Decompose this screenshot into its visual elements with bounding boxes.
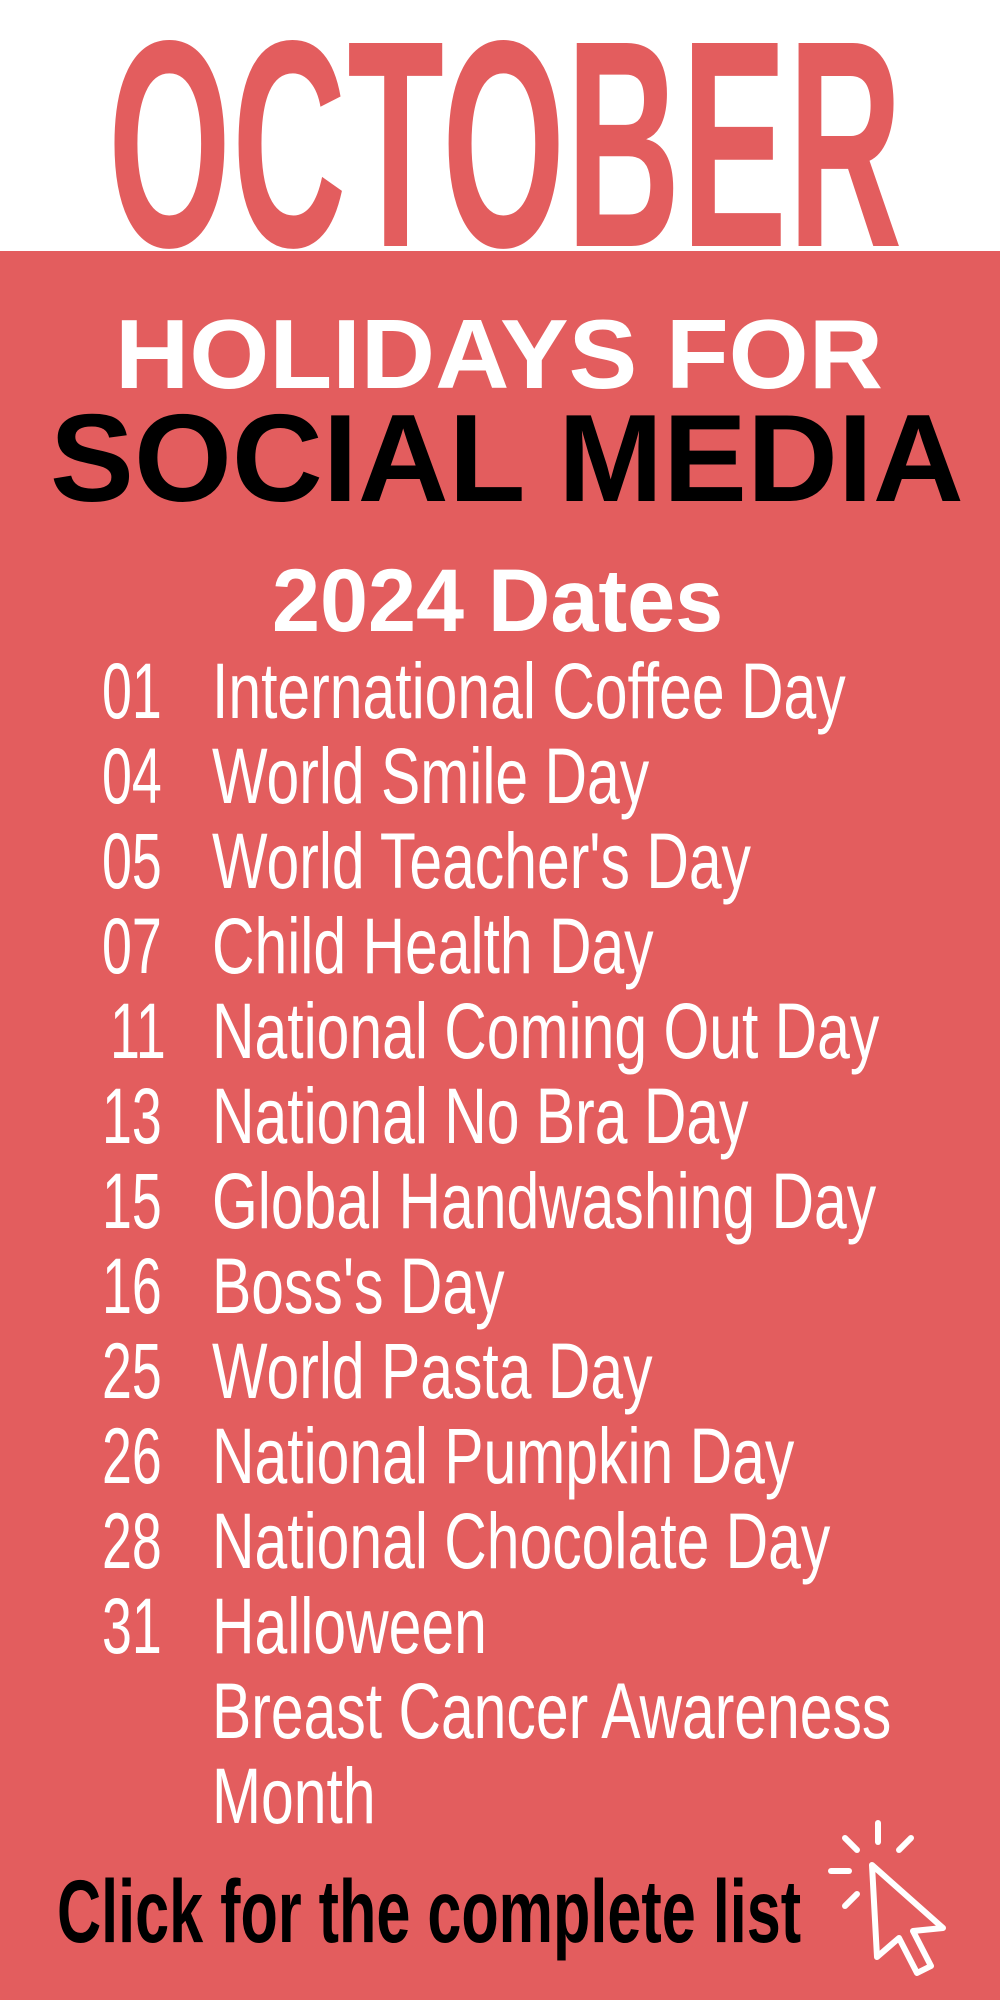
- heading: HOLIDAYS FOR: HOLIDAYS FOR: [115, 299, 883, 409]
- holiday list: International Coffee Day: [212, 646, 846, 735]
- icon: click cursor: [828, 1820, 946, 1976]
- holiday list: National Coming Out Day: [212, 986, 879, 1075]
- subheading: 2024 Dates: 2024 Dates: [272, 550, 723, 650]
- holiday list: World Pasta Day: [212, 1326, 652, 1415]
- holiday list: National Chocolate Day: [212, 1496, 830, 1585]
- holiday list: Global Handwashing Day: [212, 1156, 876, 1245]
- holiday list: 15: [102, 1156, 162, 1245]
- holiday list: World Smile Day: [212, 731, 649, 820]
- holiday list: 04: [102, 731, 162, 820]
- holiday list: National No Bra Day: [212, 1071, 748, 1160]
- holiday list: 25: [102, 1326, 162, 1415]
- holiday list: 01: [102, 646, 162, 735]
- holiday list: 05: [102, 816, 162, 905]
- holiday list: [102, 646, 891, 1840]
- call to action text: Click for the complete list: [57, 1861, 801, 1961]
- holiday list: 31: [102, 1581, 162, 1670]
- holiday list: 26: [102, 1411, 162, 1500]
- holiday list: Breast Cancer Awareness: [212, 1666, 891, 1755]
- holiday list: Halloween: [212, 1581, 487, 1670]
- holiday list: World Teacher's Day: [212, 816, 751, 905]
- holiday list: 28: [102, 1496, 162, 1585]
- holiday list: National Pumpkin Day: [212, 1411, 794, 1500]
- holiday list: 07: [102, 901, 162, 990]
- holiday list: Month: [212, 1751, 376, 1840]
- holiday list: 16: [102, 1241, 162, 1330]
- holiday list: Child Health Day: [212, 901, 654, 990]
- holiday list: 11: [110, 986, 166, 1075]
- holiday list: 13: [102, 1071, 162, 1160]
- heading: SOCIAL MEDIA: SOCIAL MEDIA: [50, 390, 964, 528]
- holiday list: Boss's Day: [212, 1241, 505, 1330]
